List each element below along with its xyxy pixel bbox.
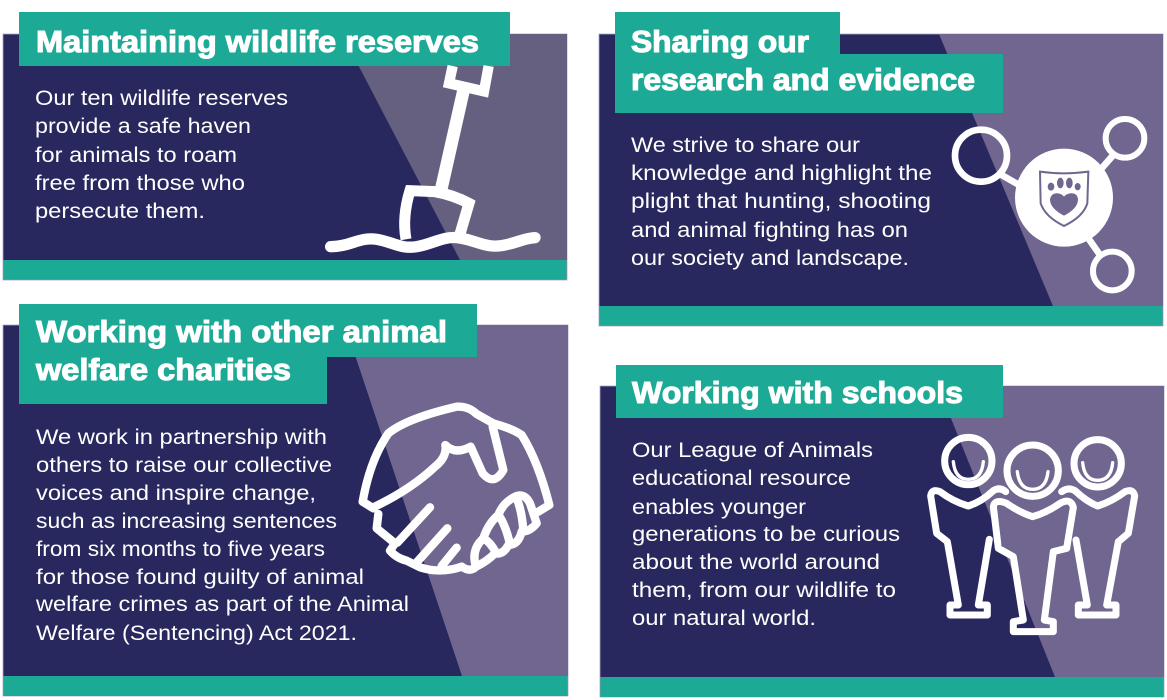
text block: schools description: enables younger <box>632 495 806 519</box>
heading: maintaining wildlife reserves <box>19 12 510 66</box>
heading: sharing our research and evidence: research and evidence <box>631 62 975 97</box>
text block: partnership description: voices and inspire change, <box>36 481 316 505</box>
text block: partnership description: for those found guilty of animal <box>36 565 364 589</box>
icon: spade in ground <box>331 66 535 247</box>
text block: research description: plight that hunting, shooting <box>631 189 931 213</box>
heading: sharing our research and evidence <box>615 12 1003 113</box>
heading: working with schools: Working with schools <box>632 375 963 410</box>
text block: schools description <box>632 438 900 630</box>
heading: sharing our research and evidence: Sharing our <box>631 24 809 59</box>
text block: research description: our society and landscape. <box>631 246 909 270</box>
text block: schools description: generations to be curious <box>632 522 900 546</box>
heading: working with schools <box>616 365 1003 418</box>
text block: schools description: educational resource <box>632 466 851 490</box>
text block: partnership description: welfare crimes as part of the Animal <box>35 592 409 616</box>
text block: research description: knowledge and highlight the <box>631 161 932 185</box>
text block: reserves description: free from those who <box>35 171 245 195</box>
panel: sharing our research and evidence <box>599 12 1163 326</box>
heading: working with other animal welfare charities: welfare charities <box>35 352 291 387</box>
text block: research description: We strive to share our <box>631 133 860 157</box>
heading: working with other animal welfare charities <box>19 304 477 404</box>
text block: partnership description: such as increasing sentences <box>36 509 337 533</box>
text block: research description: and animal fighting has on <box>631 218 908 242</box>
text block: reserves description: for animals to roam <box>35 143 237 167</box>
panel: working with schools <box>600 365 1164 697</box>
text block: partnership description <box>35 425 409 645</box>
text block: partnership description: others to raise our collective <box>36 453 332 477</box>
text block: reserves description: Our ten wildlife reserves <box>35 86 288 110</box>
text block: partnership description: Welfare (Sentencing) Act 2021. <box>36 621 357 645</box>
text block: partnership description: We work in partnership with <box>36 425 327 449</box>
text block: reserves description <box>35 86 288 223</box>
panel: working with other animal welfare charities <box>3 304 568 696</box>
text block: reserves description: persecute them. <box>35 199 205 223</box>
text block: schools description: our natural world. <box>632 606 816 630</box>
icon: network with paw shield <box>955 119 1144 290</box>
heading: working with other animal welfare charities: Working with other animal <box>36 314 447 349</box>
text block: research description <box>631 133 932 270</box>
panel: maintaining wildlife reserves <box>3 12 567 280</box>
heading: maintaining wildlife reserves: Maintaining wildlife reserves <box>36 24 479 59</box>
icon: handshake <box>363 407 549 571</box>
text block: partnership description: from six months to five years <box>36 537 325 561</box>
text block: reserves description: provide a safe haven <box>35 114 251 138</box>
text block: schools description: them, from our wildlife to <box>632 578 896 602</box>
text block: schools description: Our League of Animals <box>632 438 873 462</box>
icon: three smiling people <box>931 437 1135 632</box>
text block: schools description: about the world around <box>632 550 880 574</box>
